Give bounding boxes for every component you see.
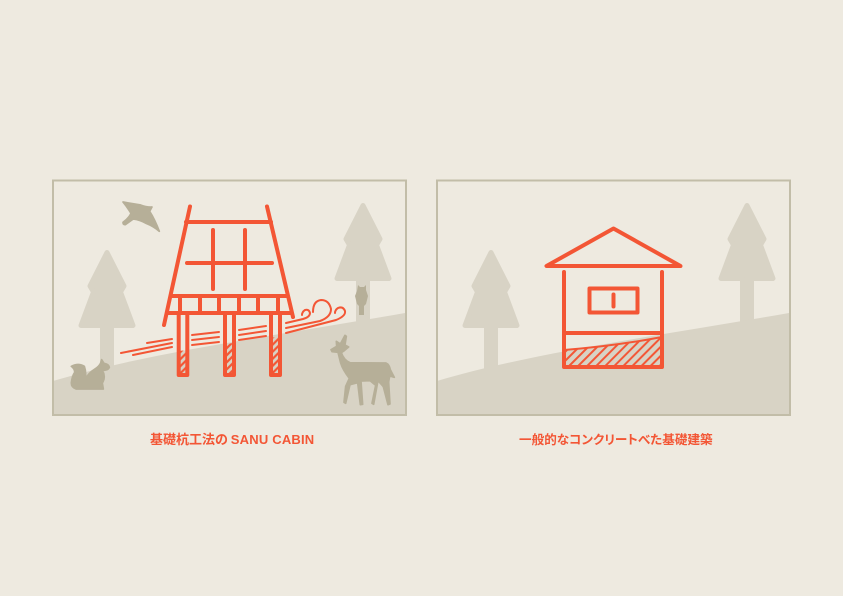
icon: squirrel bbox=[71, 360, 109, 389]
cabin on stilts bbox=[164, 206, 293, 375]
icon: flying bird bbox=[123, 202, 159, 231]
house with concrete foundation bbox=[546, 228, 680, 367]
ground slope bbox=[437, 313, 789, 415]
panel frame bbox=[53, 180, 406, 415]
icon: deer bbox=[331, 335, 394, 405]
stilt underground hatching bbox=[179, 336, 280, 375]
house outline bbox=[546, 228, 680, 367]
icon: small animal on trunk bbox=[355, 285, 368, 315]
icon: wind lines bbox=[121, 300, 345, 355]
ground slope bbox=[53, 313, 405, 415]
caption: SANU CABIN: 基礎杭工法の SANU CABIN bbox=[150, 429, 314, 448]
tree: left bbox=[465, 252, 517, 368]
panel: conventional concrete foundation bbox=[437, 180, 790, 415]
panel frame bbox=[437, 180, 790, 415]
caption: concrete foundation: 一般的なコンクリートべた基礎建築 bbox=[519, 429, 713, 448]
tree: right bbox=[337, 206, 389, 321]
foundation hatching bbox=[564, 337, 662, 367]
stilts bbox=[179, 313, 280, 375]
tree: right bbox=[721, 206, 773, 321]
roof and floor frame bbox=[164, 206, 293, 325]
tree: left bbox=[81, 252, 133, 368]
panel: SANU CABIN pile foundation bbox=[53, 180, 406, 415]
